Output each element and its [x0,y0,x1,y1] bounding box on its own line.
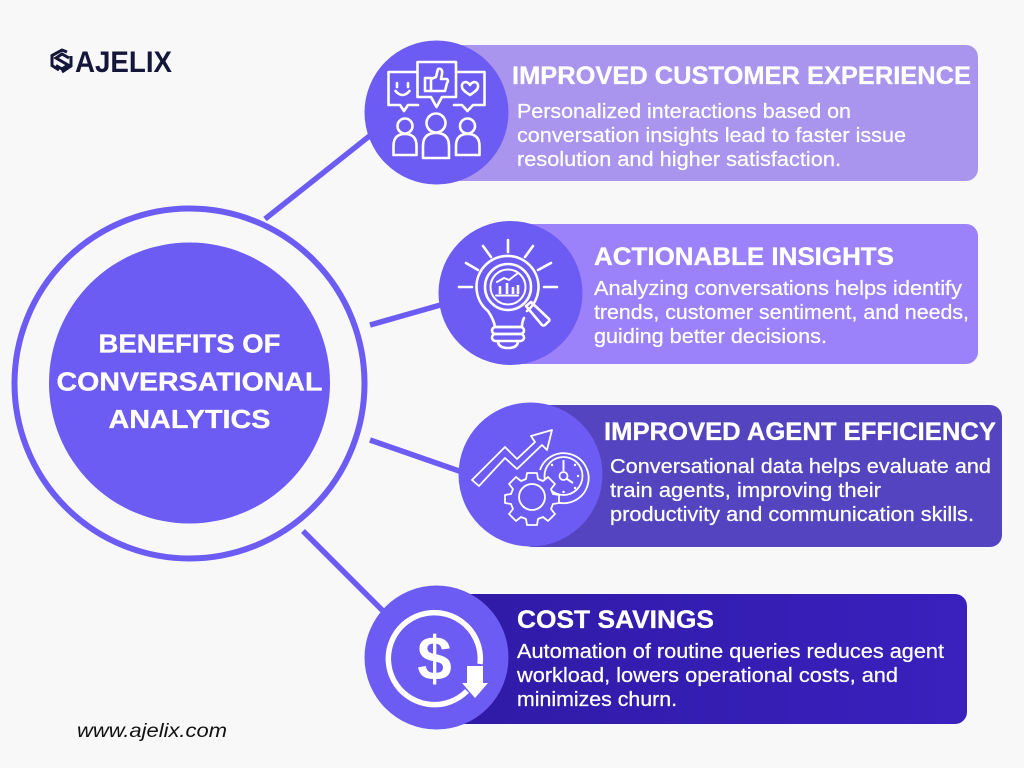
card 4 body: Automation of routine queries reduces agent [517,641,944,663]
card 3: improved agent efficiency [458,402,1002,547]
central title: CONVERSATIONAL [56,366,323,396]
card 1 icon circle: people with feedback bubbles [364,40,508,184]
central title: ANALYTICS [108,404,270,434]
logo: Ajelix: AJELIX [75,46,172,79]
website url: www.ajelix.com [77,721,227,742]
card 4 icon circle: dollar with down arrow: $ [417,625,452,694]
connector lines [265,134,462,612]
central circle: benefits of conversational analytics [14,208,364,558]
card 3 body: productivity and communication skills. [610,504,974,526]
central title [56,328,323,434]
card 2 body: guiding better decisions. [594,326,827,348]
card 1 body [517,101,906,171]
card 1 body: resolution and higher satisfaction. [517,149,841,171]
card 2 body [594,278,969,348]
card 4 body [516,641,944,711]
central title: BENEFITS OF [98,328,280,358]
card 2 body: trends, customer sentiment, and needs, [594,302,969,324]
card 3 heading: IMPROVED AGENT EFFICIENCY [604,418,996,446]
card 1: improved customer experience [364,40,978,184]
card 1 heading: IMPROVED CUSTOMER EXPERIENCE [512,62,971,90]
card 3 icon circle: growth arrow, gear and clock [458,402,602,546]
card 2 heading: ACTIONABLE INSIGHTS [594,243,894,271]
card 3 body: Conversational data helps evaluate and [610,456,991,478]
card 3 body: train agents, improving their [610,480,881,502]
card 1 body: conversation insights lead to faster issue [517,125,906,147]
card 4 body: minimizes churn. [517,689,677,711]
card 2 icon circle: lightbulb with magnifier [438,221,582,365]
card 1 body: Personalized interactions based on [517,101,851,123]
card 2: actionable insights [438,221,978,365]
card 3 body [610,456,991,526]
card 4 body: workload, lowers operational costs, and [516,665,898,687]
card 2 body: Analyzing conversations helps identify [594,278,962,300]
card 4: cost savings [364,586,967,730]
card 4 icon circle: dollar with down arrow [364,586,508,730]
card 4 heading: COST SAVINGS [517,606,714,634]
